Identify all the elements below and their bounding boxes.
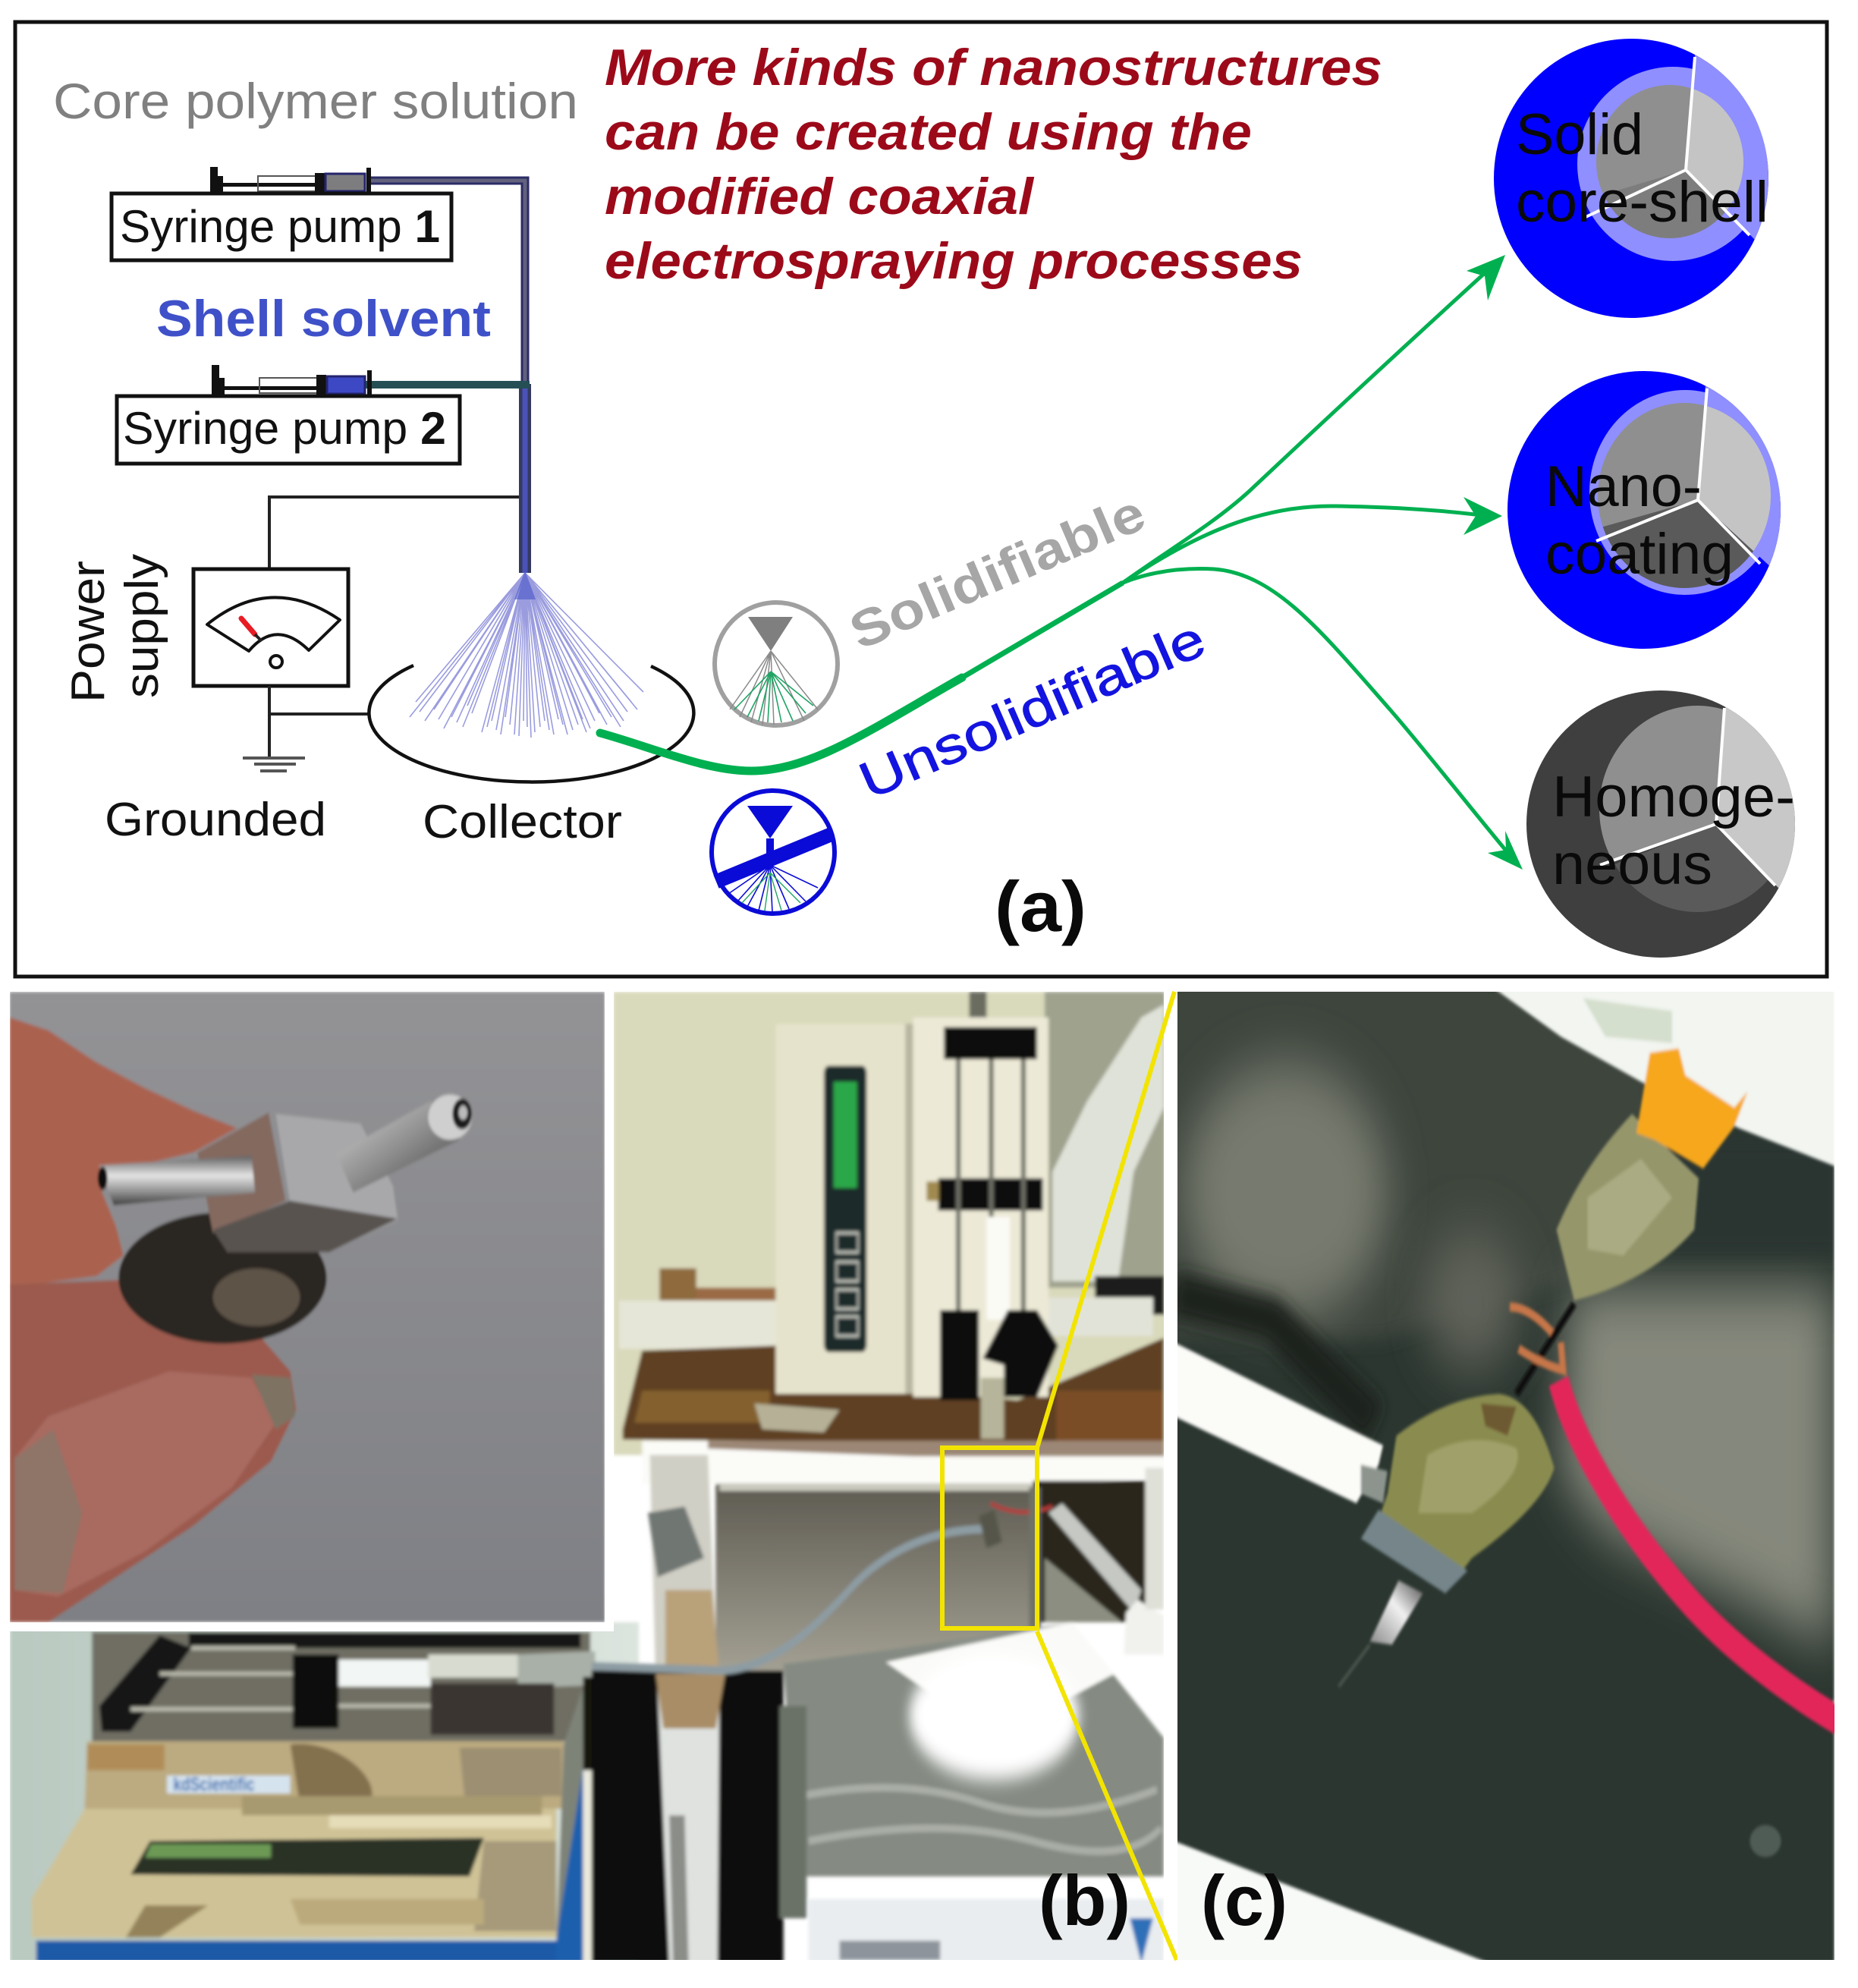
tubing and wires — [269, 181, 530, 573]
photo region: syringe pump, lower left: kdScientific — [173, 1774, 255, 1795]
icon: syringe 1 — [210, 167, 371, 193]
orange tape — [1636, 1049, 1748, 1169]
nanoparticle: nano-coating: Nano- — [1545, 455, 1702, 519]
label: core polymer solution: Core polymer solution — [53, 73, 578, 129]
nozzle body — [197, 1112, 285, 1233]
copper wire — [1510, 1307, 1563, 1370]
lower resin blob — [1374, 1394, 1555, 1593]
label: grounded: Grounded — [105, 794, 326, 846]
needle — [1517, 1304, 1574, 1394]
rig leg — [650, 1455, 718, 1680]
label: shell solvent: Shell solvent — [156, 290, 491, 348]
white cable — [1174, 1342, 1383, 1503]
syringe pump body — [775, 1024, 905, 1394]
label: collector: Collector — [423, 796, 622, 848]
arrow: thick green stem — [600, 583, 1123, 771]
icon: syringe 2 — [212, 365, 372, 395]
white band and under-table frame — [642, 1441, 1164, 1484]
red cable — [1558, 1381, 1841, 1722]
label: power supply — [62, 554, 168, 703]
nanoparticle: homogeneous — [1526, 690, 1795, 958]
label: unsolidifiable: Unsolidifiable — [851, 609, 1214, 810]
blurred background shapes — [1134, 940, 1841, 1648]
panel (c): close-up photo of the nozzle — [1134, 940, 1847, 1970]
photo region: syringe pump, lower left — [10, 1622, 665, 1970]
upper finger — [10, 1018, 237, 1288]
nanoparticle: solid core-shell: Solid — [1516, 102, 1643, 167]
lower finger and thumb — [10, 1280, 296, 1622]
nanoparticle: solid core-shell — [1494, 39, 1768, 318]
nanoparticle: nano-coating — [1507, 371, 1781, 649]
panel label (b): (b) — [1039, 1861, 1130, 1940]
arrow: to solid core-shell — [1123, 255, 1505, 583]
heading: red statement: More kinds of nanostructures — [605, 39, 1382, 96]
photo region: electrospraying rig, center — [592, 992, 1167, 1963]
upper resin blob — [1557, 1114, 1699, 1301]
electrospray fan — [410, 571, 643, 738]
nanoparticle: solid core-shell: core-shell — [1516, 170, 1768, 234]
panel label (a): (a) — [995, 867, 1086, 946]
nanoparticle: homogeneous: Homoge- — [1552, 765, 1795, 829]
icon: power supply meter — [193, 569, 348, 686]
grey tube — [592, 1529, 986, 1671]
icon: ground symbol — [243, 686, 369, 771]
panel (a): schematic — [15, 0, 1858, 1009]
icon: unsolidifiable droplet — [712, 791, 835, 914]
heading: red statement: can be created using the — [605, 103, 1252, 161]
dark base — [118, 1213, 327, 1344]
nozzle tubes — [99, 1156, 255, 1205]
nanoparticle: nano-coating: coating — [1545, 522, 1734, 587]
arrow: to homogeneous — [1123, 569, 1523, 870]
box: syringe pump 2: Syringe pump 2 — [123, 403, 446, 454]
arrow: to nano-coating — [1123, 497, 1502, 583]
foil collector — [784, 1622, 1164, 1876]
panel (b): apparatus photo — [10, 992, 1167, 1970]
zoom indicator: yellow box and lines — [942, 992, 1177, 1960]
icon: solidifiable droplet — [715, 602, 838, 725]
collector ring — [369, 665, 693, 782]
table top — [621, 1337, 1164, 1443]
heading: red statement — [605, 39, 1382, 290]
box: syringe pump 1: Syringe pump 1 — [120, 201, 440, 252]
label: power supply: supply — [116, 554, 168, 698]
nanoparticle: homogeneous: neous — [1552, 832, 1712, 897]
label: solidifiable: Solidifiable — [841, 483, 1153, 661]
label: power supply: Power — [62, 561, 115, 703]
panel label (c): (c) — [1201, 1861, 1287, 1940]
heading: red statement: electrospraying processes — [605, 232, 1303, 290]
heading: red statement: modified coaxial — [605, 168, 1035, 225]
inset photo: coaxial nozzle held in fingers — [10, 992, 614, 1631]
left syringe and box on the table — [659, 1269, 696, 1301]
